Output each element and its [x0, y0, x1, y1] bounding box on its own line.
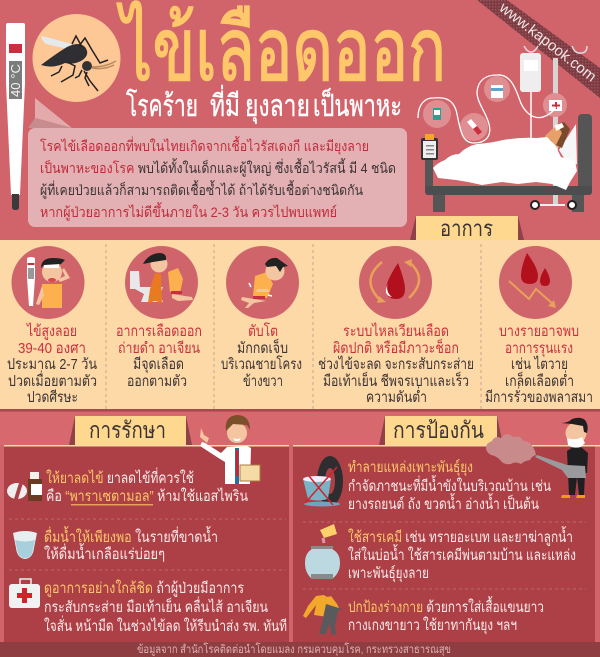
symptom text 3: มักกดเจ็บ [237, 338, 288, 357]
treatment text 3 [44, 579, 287, 635]
subtitle: เป็นพาหะ [313, 87, 402, 123]
intro paragraph: เป็นพาหะของโรค พบได้ทั้งในเด็กและผู้ใหญ่ ซึ่งเชื้อไวรัสนี้ มี 4 ชนิด [40, 158, 396, 177]
symptom 4: circulation failure [359, 246, 432, 319]
heading: treatment [69, 416, 192, 445]
treatment text 1 [46, 467, 248, 506]
prevention text 1 [348, 459, 551, 513]
icon: glass of water [13, 531, 37, 559]
prevention text 3 [348, 596, 544, 635]
intro paragraph: ผู้ที่เคยป่วยแล้วก็สามารถติดเชื้อซ้ำได้ ถ้าได้รับเชื้อต่างชนิดกัน [40, 180, 363, 199]
icon: thermometer [6, 23, 25, 210]
treatment text 1: คือ “พาราเซตามอล” ห้ามใช้แอสไพริน [46, 487, 248, 505]
symptom text 2: ออกตามตัว [127, 373, 187, 390]
illustration: patient in hospital bed [418, 46, 592, 212]
symptom text 2: อาการเลือดออก [116, 323, 202, 340]
symptom text 4: ผิดปกติ หรือมีภาวะช็อก [333, 338, 459, 357]
symptom 3: enlarged liver [226, 246, 299, 319]
symptom text 1: ประมาณ 2-7 วัน [7, 356, 97, 373]
panel: treatment [4, 445, 289, 642]
symptom text 5: บางรายอาจพบ [499, 323, 579, 340]
symptom text 1: ไข้สูงลอย [26, 322, 77, 340]
intro paragraph: หากผู้ป่วยอาการไม่ดีขึ้นภายใน 2-3 วัน ควรไปพบแพทย์ [40, 202, 337, 221]
symptom text 3: บริเวณชายโครง [221, 355, 302, 373]
symptom text 5 [485, 323, 593, 406]
IV tube [418, 75, 556, 143]
treatment text 2: ให้ดื่มน้ำเกลือแร่บ่อยๆ [44, 543, 165, 563]
symptom text 2 [116, 323, 202, 390]
subtitle: โรคร้าย [126, 88, 198, 123]
subtitle: ที่มี [210, 85, 240, 123]
intro text box [28, 128, 407, 227]
symptom text 4 [318, 322, 474, 406]
illustration: doctor with clipboard [200, 415, 260, 484]
heading: treatment: การรักษา [89, 417, 166, 443]
source footer [0, 642, 600, 657]
illustration: man spraying with fogging machine [535, 418, 588, 498]
heading: symptoms: อาการ [440, 216, 493, 241]
symptoms panel [0, 240, 600, 412]
icon: mosquito in circle [32, 14, 120, 102]
icon: pills and bottle [7, 472, 42, 501]
heading: symptoms [410, 216, 524, 241]
icon: long sleeve shirt and trousers [303, 595, 342, 635]
prevention text 1: กำจัดภาชนะที่มีน้ำขังในบริเวณบ้าน เช่น [348, 475, 551, 495]
symptom text 4: ระบบไหลเวียนเลือด [343, 322, 449, 340]
treatment text 3: ดูอาการอย่างใกล้ชิด ถ้าผู้ป่วยมีอาการ [44, 579, 244, 597]
prevention text 2: เพาะพันธุ์ยุงลาย [348, 565, 429, 583]
symptom text 4: ช่วงไข้จะลด จะกระสับกระส่าย [318, 355, 474, 373]
speech pointer [35, 98, 72, 128]
symptom text 5: อาการรุนแรง [505, 340, 573, 358]
treatment text 3: กระสับกระส่าย มือเท้าเย็น คลื่นไส้ อาเจียน [44, 596, 268, 616]
icon: water jar with chemical [305, 524, 340, 579]
treatment text 1: ให้ยาลดไข้ ยาลดไข้ที่ควรใช้ [46, 467, 194, 487]
symptom text 3 [221, 322, 302, 390]
treatment text 2 [44, 526, 218, 563]
treatment text 2: ดื่มน้ำให้เพียงพอ ในรายที่ขาดน้ำ [44, 526, 218, 546]
icon: crossed out tyre and bucket [303, 456, 343, 506]
symptom text 2: ถ่ายดำ อาเจียน [118, 340, 200, 357]
symptom text 1: 39-40 องศา [18, 340, 86, 357]
lighter band behind lower headings [0, 412, 600, 445]
heading: prevention: การป้องกัน [393, 417, 484, 443]
symptom text 1: ปวดศีรษะ [27, 389, 78, 406]
intro paragraph [40, 136, 396, 221]
icon: thermometer: 40 °C [8, 64, 23, 97]
symptom 1: high fever [12, 246, 84, 319]
illustration: fog spray cloud [486, 434, 536, 464]
symptom text 5: เช่น ไตวาย [511, 355, 568, 373]
title: ไข้เลือดออก [117, 0, 446, 99]
prevention text 1: ยางรถยนต์ ถัง ขวดน้ำ อ่างน้ำ เป็นต้น [348, 493, 539, 513]
symptom text 3: ข้างขวา [243, 373, 283, 390]
panel: prevention [293, 445, 600, 642]
intro paragraph: โรคไข้เลือดออกที่พบในไทยเกิดจากเชื้อไวรัสเดงกี และมียุงลาย [40, 136, 369, 155]
symptom text 1 [7, 322, 97, 406]
symptom text 2: มีจุดเลือด [133, 356, 184, 374]
prevention text 1: ทำลายแหล่งเพาะพันธุ์ยุง [348, 459, 473, 477]
prevention text 3: ปกป้องร่างกาย ด้วยการใส่เสื้อแขนยาว [348, 596, 544, 616]
prevention text 2 [348, 526, 576, 583]
symptom text 1: ปวดเมื่อยตามตัว [8, 370, 97, 390]
source footer: ข้อมูลจาก สำนักโรคติดต่อนำโดยแมลง กรมควบคุมโรค, กระทรวงสาธารณสุข [137, 642, 451, 656]
symptom text 4: มือเท้าเย็น ชีพจรเบาและเร็ว [323, 371, 469, 390]
subtitle [126, 85, 402, 125]
subtitle: ยุงลาย [245, 90, 310, 125]
icon: first aid kit [9, 579, 40, 608]
prevention text 3: กางเกงขายาว ใช้ยาทากันยุง ฯลฯ [348, 616, 517, 635]
corner ribbon: website: www.kapook.com [495, 0, 599, 85]
treatment text 3: ใจสั่น หน้ามืด ในช่วงไข้ลด ให้รีบนำส่ง รพ. ทันที [44, 615, 287, 635]
symptom 5: severe cases [499, 246, 572, 319]
symptom 2: vomiting and bleeding [125, 246, 198, 319]
symptom text 3: ตับโต [248, 322, 278, 340]
symptom text 4: ความดันต่ำ [366, 386, 427, 406]
symptom text 5: เกล็ดเลือดต่ำ [505, 370, 574, 390]
